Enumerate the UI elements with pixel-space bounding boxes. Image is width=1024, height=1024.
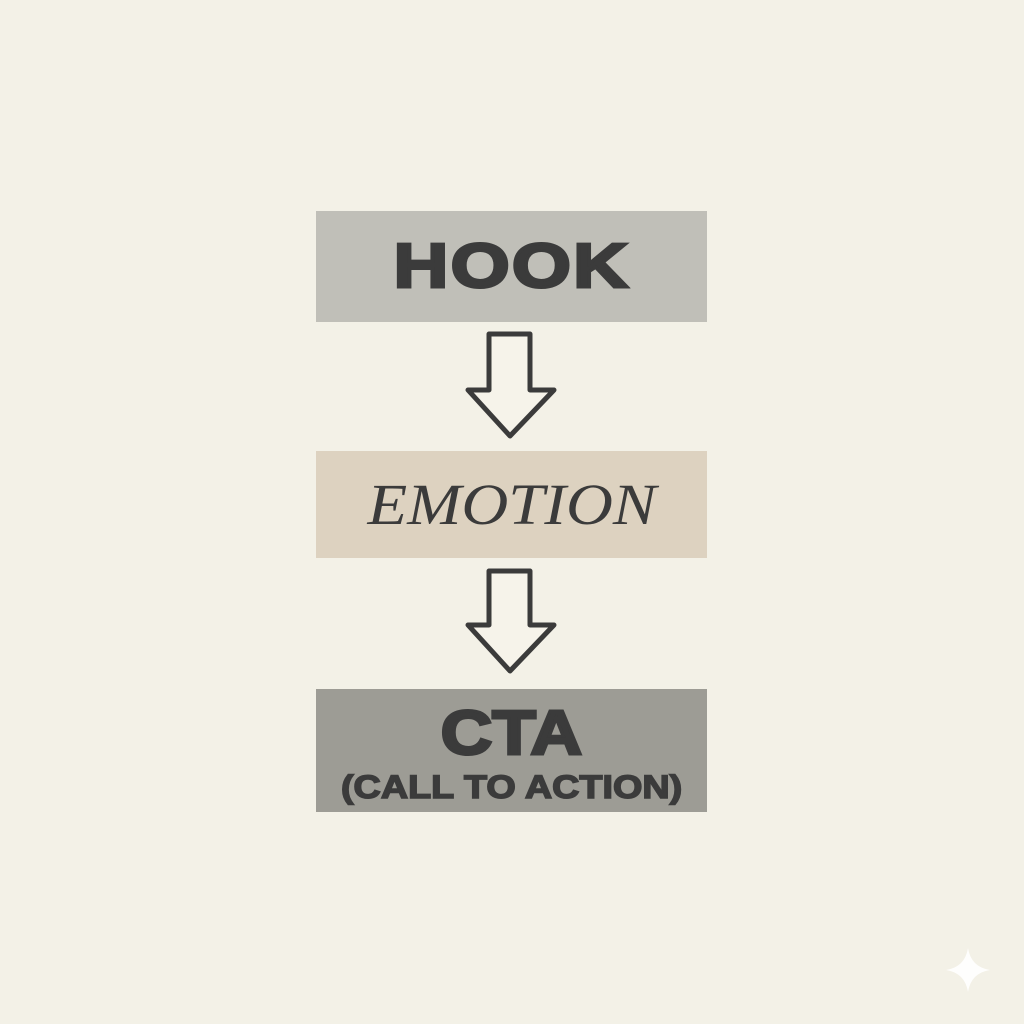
- arrow: hook to emotion: [466, 332, 556, 438]
- box: hook: [316, 211, 707, 322]
- box: cta: [316, 689, 707, 812]
- box: hook: HOOK: [393, 232, 630, 301]
- box: emotion: EMOTION: [367, 472, 656, 537]
- arrow: emotion to cta: [466, 568, 556, 674]
- cta title: CTA: [441, 698, 582, 768]
- icon: sparkle: [947, 949, 989, 991]
- box: emotion: [316, 451, 707, 558]
- cta subtitle: (CALL TO ACTION): [341, 768, 682, 804]
